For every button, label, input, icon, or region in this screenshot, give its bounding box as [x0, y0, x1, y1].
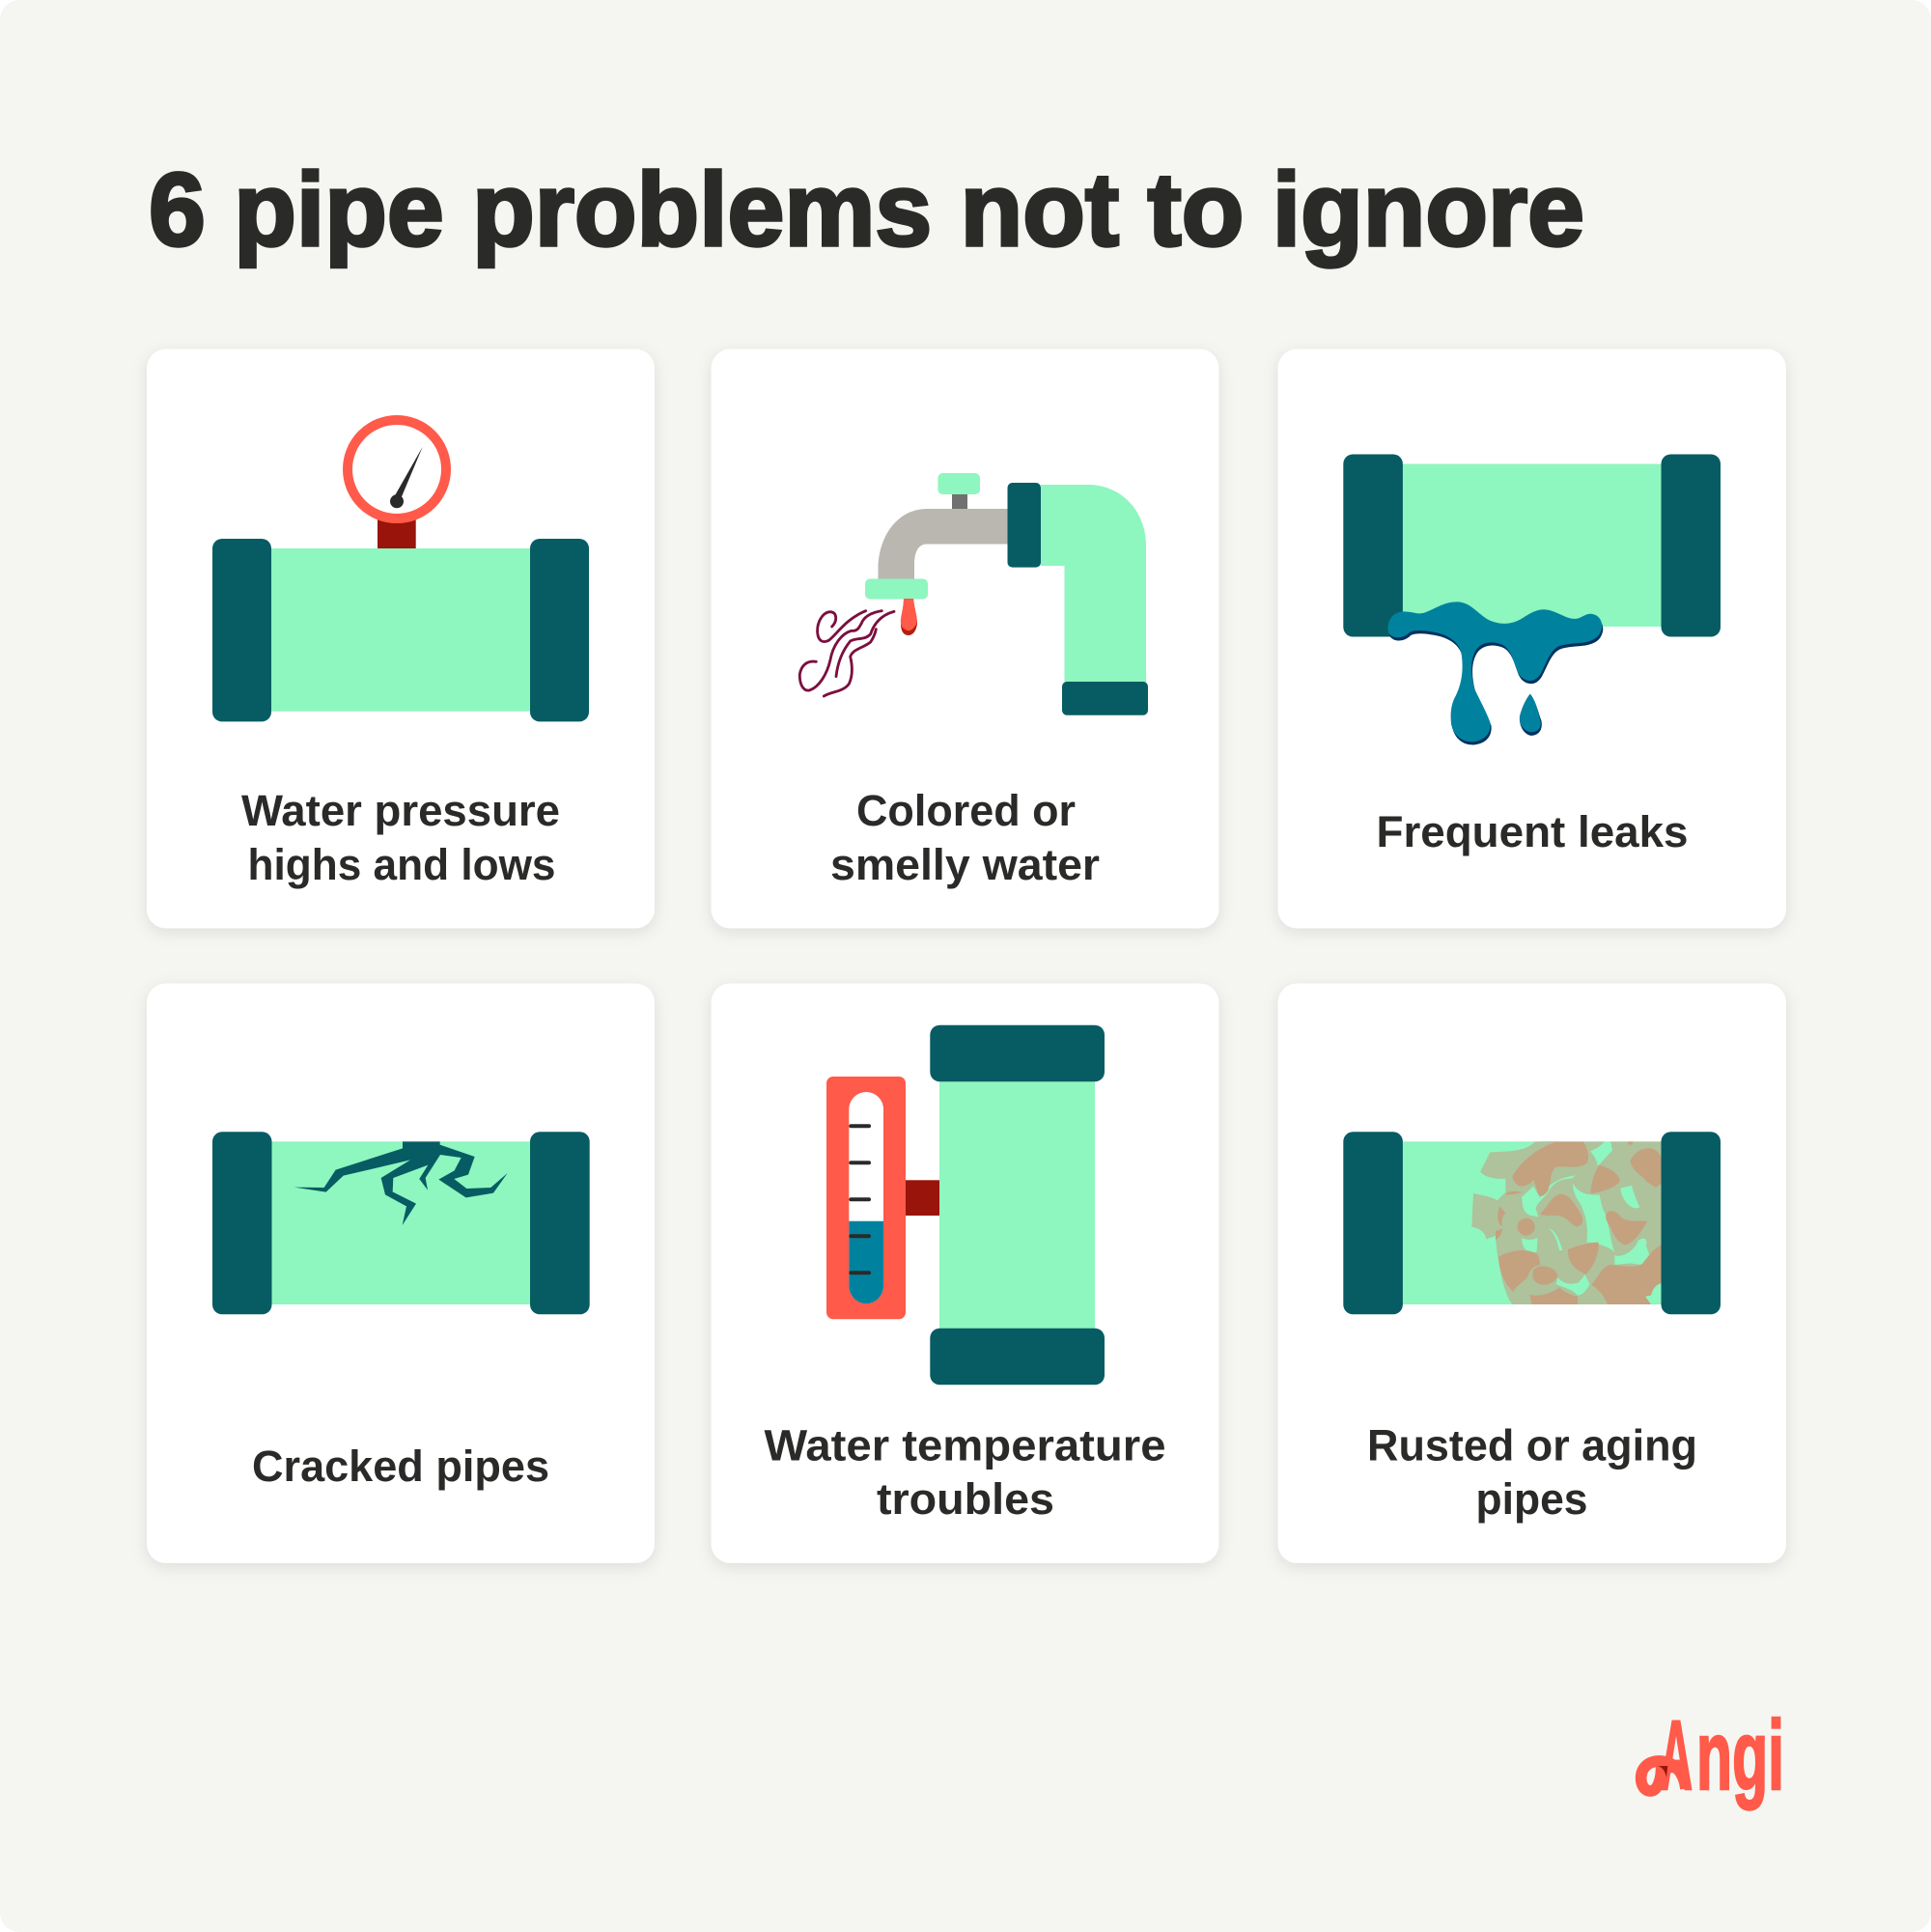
panel: cracked pipes [147, 983, 655, 1563]
title: 6 pipe problems not to ignore [149, 151, 1584, 267]
logo: Angi [1641, 1700, 1784, 1810]
icon: faucet with elbow pipe [799, 473, 1148, 715]
label: frequent leaks: Frequent leaks [1377, 807, 1688, 856]
label: highs and lows: highs and lows [247, 840, 556, 889]
icon: vertical pipe with thermometer [826, 1025, 1105, 1385]
icon: odor wisps [799, 611, 894, 696]
icon: pipe with pressure gauge [212, 420, 589, 721]
label: rusted or aging: Rusted or aging [1367, 1421, 1697, 1470]
panel: colored or smelly water [711, 350, 1218, 929]
icon: leaking pipe [1343, 454, 1721, 744]
label: smelly water: smelly water [830, 840, 1100, 889]
label: troubles: troubles [877, 1474, 1054, 1524]
label: water pressure: Water pressure [241, 786, 560, 835]
panel: water temperature troubles [711, 983, 1218, 1563]
label: water temperature: Water temperature [765, 1421, 1166, 1470]
panel: rusted or aging pipes [1278, 983, 1786, 1563]
icon: red water drop [901, 599, 917, 635]
icon: rusted pipe [1343, 1132, 1721, 1314]
panel: water pressure [147, 350, 655, 929]
panel: frequent leaks [1278, 350, 1786, 929]
icon: cracked pipe [212, 1132, 590, 1314]
label: pipes: pipes [1475, 1474, 1587, 1524]
label: cracked pipes: Cracked pipes [252, 1442, 549, 1491]
logo: Angi: A [1660, 1700, 1693, 1810]
label: colored or: Colored or [856, 786, 1076, 835]
logo: Angi: ngi [1696, 1700, 1784, 1810]
